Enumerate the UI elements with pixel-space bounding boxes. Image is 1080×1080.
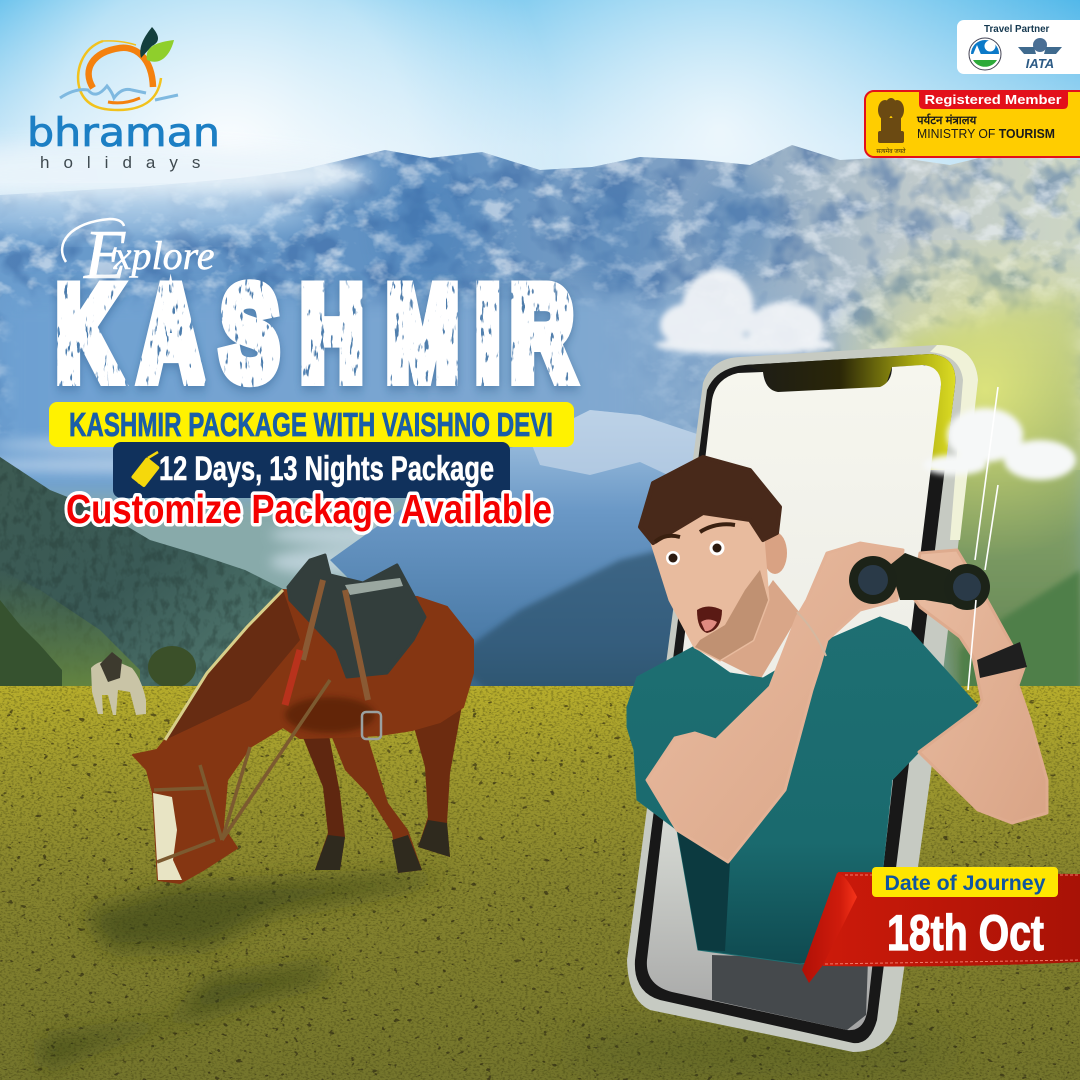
ministry english name: MINISTRY OF TOURISM: [917, 127, 1055, 141]
horse grazing: [133, 555, 473, 883]
teal t-shirt: [627, 617, 978, 964]
icon: national emblem: [876, 98, 906, 155]
right arm: [913, 550, 1047, 823]
icon: tourism partner seal: [969, 38, 1001, 70]
background: blue mountain ridge: [330, 410, 700, 700]
ear: [763, 532, 787, 574]
KASHMIR distressed title: KASHMIR: [57, 261, 573, 406]
logo: [27, 27, 220, 172]
face: [652, 513, 768, 660]
date of journey ribbon: Date of Journey: [884, 871, 1046, 895]
background: cloud bands in the valley: [0, 438, 530, 576]
phone screen: [647, 365, 941, 1030]
shirt shadow: [677, 830, 730, 951]
ministry hindi name: पर्यटन मंत्रालय: [916, 113, 978, 127]
duration banner: 12 Days, 13 Nights Package: [159, 450, 494, 488]
horse body: [133, 590, 473, 883]
hooves: [315, 820, 450, 873]
bracelet: [797, 612, 826, 656]
background: snowy mountain range: [0, 140, 1080, 496]
logo wordmark: bhraman: [27, 111, 220, 156]
package title banner: KASHMIR PACKAGE WITH VAISHNO DEVI: [69, 406, 553, 443]
hair: [640, 457, 780, 543]
phone outer frame: [627, 345, 978, 1052]
icon: suitcase: [131, 452, 160, 488]
travel partner heading: Travel Partner: [984, 24, 1050, 35]
wristwatch: [977, 642, 1027, 678]
cloud above phone: [655, 270, 835, 354]
horse near front leg: [327, 725, 422, 873]
background: sky: [0, 0, 1080, 420]
duration banner: [113, 442, 510, 498]
customize package callout: Customize Package Available: [66, 486, 552, 532]
background: green valley right of the phone: [820, 240, 1080, 700]
explore script heading: E: [84, 217, 127, 294]
arm reaching to binoculars: [647, 543, 903, 862]
horse far front leg: [300, 730, 345, 870]
explore script heading: xplore: [113, 233, 214, 278]
saddle: [288, 555, 425, 677]
background: meadow: [0, 686, 1080, 1080]
horse mane highlight: [165, 590, 283, 740]
binoculars: [849, 553, 990, 610]
ribbon band: [823, 872, 1080, 966]
icon: national emblem: सत्यमेव जयते: [876, 147, 906, 155]
phone bezel: [635, 354, 955, 1043]
man with binoculars: [627, 457, 1047, 1030]
package title banner: [49, 402, 574, 447]
bridle: [154, 680, 330, 862]
saddle straps and stirrup: [303, 580, 368, 700]
registered member tab: [919, 90, 1068, 109]
logo tagline: holidays: [40, 153, 214, 172]
horse hind leg: [412, 700, 463, 857]
KASHMIR title shadow: KASHMIR: [57, 264, 573, 409]
background: forest hillside: [0, 450, 290, 695]
small distant horse: [91, 652, 146, 715]
cloud and light streaks at right of phone: [923, 387, 1076, 690]
ministry of tourism badge: [865, 90, 1080, 157]
grey trousers: [712, 955, 868, 1030]
eyes, brows and mouth: [655, 524, 735, 633]
logo emblem: [60, 27, 178, 110]
horse white blaze: [153, 793, 182, 880]
date of journey ribbon: [802, 867, 1080, 983]
date label: [872, 867, 1058, 897]
icon: IATA logo: IATA: [1026, 56, 1054, 71]
travel partner badge: [957, 20, 1080, 74]
horse shadow: [41, 873, 448, 1070]
ministry of tourism badge: Registered Member: [924, 92, 1062, 107]
explore script heading: [62, 217, 214, 294]
neck: [720, 580, 800, 680]
phone: [627, 345, 978, 1052]
